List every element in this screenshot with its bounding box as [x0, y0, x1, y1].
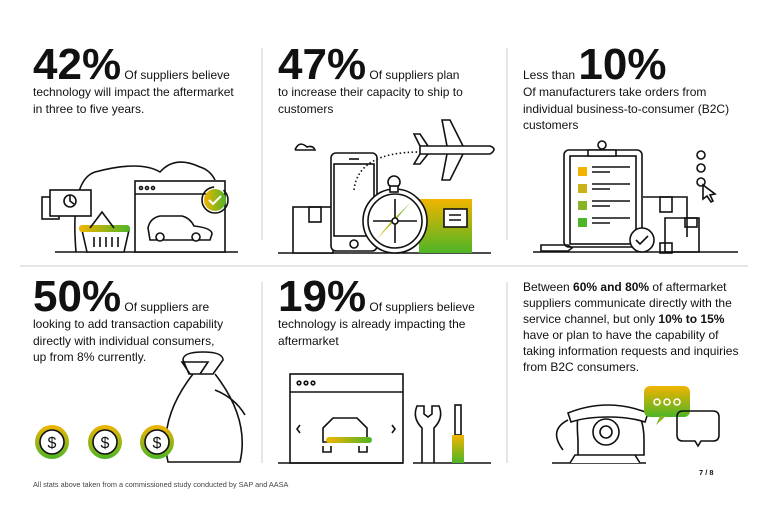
footnote: All stats above taken from a commissioned study conducted by SAP and AASA	[33, 480, 288, 489]
stat: 47%: 47% Of suppliers plan to increase their capacity to ship to customers	[278, 40, 463, 116]
illustration: technology aftermarket	[42, 162, 238, 252]
stat: 10%: Of manufacturers take orders from individual business-to-consumer (B2C) customers	[523, 85, 729, 132]
stat: 60-80%: Between 60% and 80% of aftermarket suppliers communicate directly with the service channel, but only 10% to 15% have or plan to have the capability of taking information requests and inquiries from B2C consumers.	[523, 280, 738, 374]
stat: 19%: 19% Of suppliers believe technology is already impacting the aftermarket	[278, 272, 475, 348]
stat: 10%	[523, 40, 729, 132]
illustration: money bag and coins	[35, 352, 245, 462]
illustration: shipping capacity	[278, 120, 494, 253]
page number: 7 / 8	[699, 468, 714, 477]
stat: 10%: Less than 10%	[523, 40, 666, 89]
stat: 50%: 50% Of suppliers are looking to add transaction capability directly with individual consumers, up from 8% currently.	[33, 272, 223, 364]
illustration: clipboard B2C	[533, 141, 738, 253]
illustration: car browser and tools	[278, 374, 491, 463]
stat: 42%: 42% Of suppliers believe technology will impact the aftermarket in three to five years.	[33, 40, 234, 116]
illustration: telephone and chat bubbles	[552, 386, 719, 463]
illustration: money bag and coins: $	[101, 435, 110, 452]
illustration: money bag and coins: $	[153, 435, 162, 452]
illustration: money bag and coins: $	[48, 435, 57, 452]
